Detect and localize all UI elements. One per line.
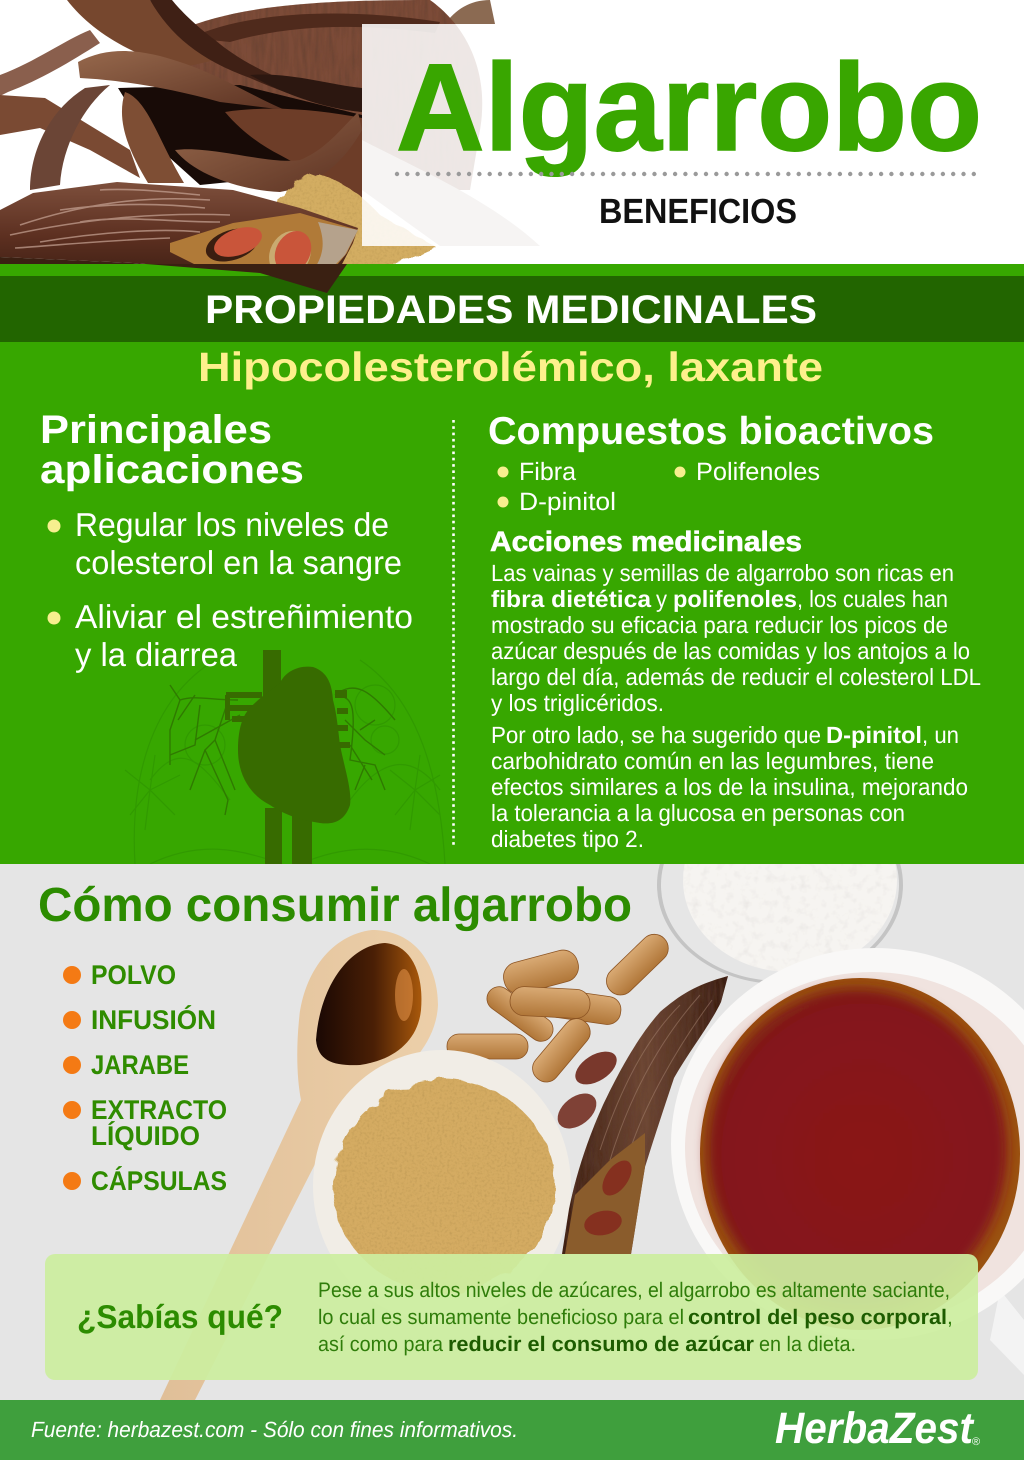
bullet list: Aliviar el estreñimiento (75, 598, 413, 635)
paragraph 1: polifenoles (673, 586, 797, 612)
bullet list: Regular los niveles de (75, 506, 389, 543)
logo: HerbaZest (775, 1404, 975, 1453)
compound list: Fibra (519, 458, 576, 486)
list: forms of consumption: LÍQUIDO (91, 1121, 200, 1151)
callout text: Pese a sus altos niveles de azúcares, el algarrobo es altamente saciante, (318, 1279, 950, 1302)
callout text: , (947, 1306, 953, 1329)
dotted rule (397, 172, 980, 176)
list: forms of consumption: POLVO (91, 960, 176, 990)
bullet list: colesterol en la sangre (75, 544, 402, 581)
paragraph 1: y los triglicéridos. (491, 690, 664, 716)
callout: did you know (45, 1254, 978, 1380)
callout text: lo cual es sumamente beneficioso para el (318, 1306, 684, 1329)
text block: main applications (40, 408, 413, 673)
text block: medicinal actions (490, 526, 981, 852)
paragraph 1: largo del día, además de reducir el colesterol LDL (491, 664, 981, 690)
compound list: D-pinitol (519, 488, 616, 516)
paragraph 2: efectos similares a los de la insulina, mejorando (491, 774, 968, 800)
paragraph 1: y (656, 586, 667, 612)
paragraph 2: la tolerancia a la glucosa en personas con (491, 800, 905, 826)
panel: how to consume (0, 864, 1024, 1400)
icon: wooden spoon (160, 930, 438, 1400)
logo: ® (972, 1436, 980, 1448)
subheading: Hipocolesterolémico, laxante (198, 344, 823, 390)
callout text: en la dieta. (759, 1333, 856, 1356)
icon: open carob pod (562, 976, 728, 1254)
panel: medicinal properties (0, 257, 1024, 864)
text block: main applications: aplicaciones (40, 448, 304, 492)
icon: powder dish (657, 864, 903, 982)
paragraph 2 (491, 722, 968, 852)
icon: seeds (558, 1052, 617, 1128)
list: forms of consumption: JARABE (91, 1050, 189, 1080)
icon: heart and lungs watermark (125, 650, 445, 864)
bullet list: y la diarrea (75, 636, 238, 673)
title: Algarrobo (396, 39, 982, 177)
compound list: Polifenoles (696, 458, 820, 486)
header photo: carob pods (0, 0, 540, 293)
heading: Compuestos bioactivos (488, 410, 934, 453)
callout text (318, 1279, 953, 1356)
footer (0, 1400, 1024, 1460)
photo: consumption forms (160, 864, 1024, 1400)
paragraph 1: , los cuales han (797, 586, 948, 612)
paragraph 1: Las vainas y semillas de algarrobo son ricas en (491, 560, 954, 586)
icon: powder bowl (313, 1050, 571, 1294)
source note: Fuente: herbazest.com - Sólo con fines informativos. (31, 1417, 518, 1442)
paragraph 2: D-pinitol (826, 722, 922, 748)
paragraph 2: carbohidrato común en las legumbres, tiene (491, 748, 934, 774)
compound list (498, 458, 820, 516)
list: forms of consumption (63, 960, 227, 1196)
heading: Principales (40, 408, 272, 452)
carob pod tip overlapping the band (0, 257, 347, 293)
icon: capsules (447, 929, 674, 1087)
callout text: reducir el consumo de azúcar (448, 1333, 754, 1356)
text block: bioactive compounds (488, 410, 934, 516)
heading: Acciones medicinales (490, 526, 802, 557)
icon: cup of tea (671, 948, 1024, 1375)
heading: Cómo consumir algarrobo (38, 879, 632, 932)
title panel (362, 24, 1024, 246)
dotted divider (452, 420, 455, 848)
paragraph 2: , un (922, 722, 959, 748)
callout text: control del peso corporal (688, 1306, 947, 1329)
callout heading: ¿Sabías qué? (77, 1298, 283, 1335)
paragraph 2: Por otro lado, se ha sugerido que (491, 722, 821, 748)
callout text: así como para (318, 1333, 443, 1356)
list: forms of consumption: INFUSIÓN (91, 1005, 216, 1035)
list: forms of consumption: EXTRACTO (91, 1095, 227, 1125)
bullet list (48, 506, 413, 673)
paragraph 1: mostrado su eficacia para reducir los picos de (491, 612, 948, 638)
subtitle: BENEFICIOS (599, 192, 797, 231)
paragraph 1: azúcar después de las comidas y los antojos a lo (491, 638, 970, 664)
heading: PROPIEDADES MEDICINALES (205, 288, 817, 332)
list: forms of consumption: CÁPSULAS (91, 1166, 227, 1196)
paragraph 2: diabetes tipo 2. (491, 826, 644, 852)
paragraph 1: fibra dietética (491, 586, 652, 612)
paragraph 1 (491, 560, 981, 716)
